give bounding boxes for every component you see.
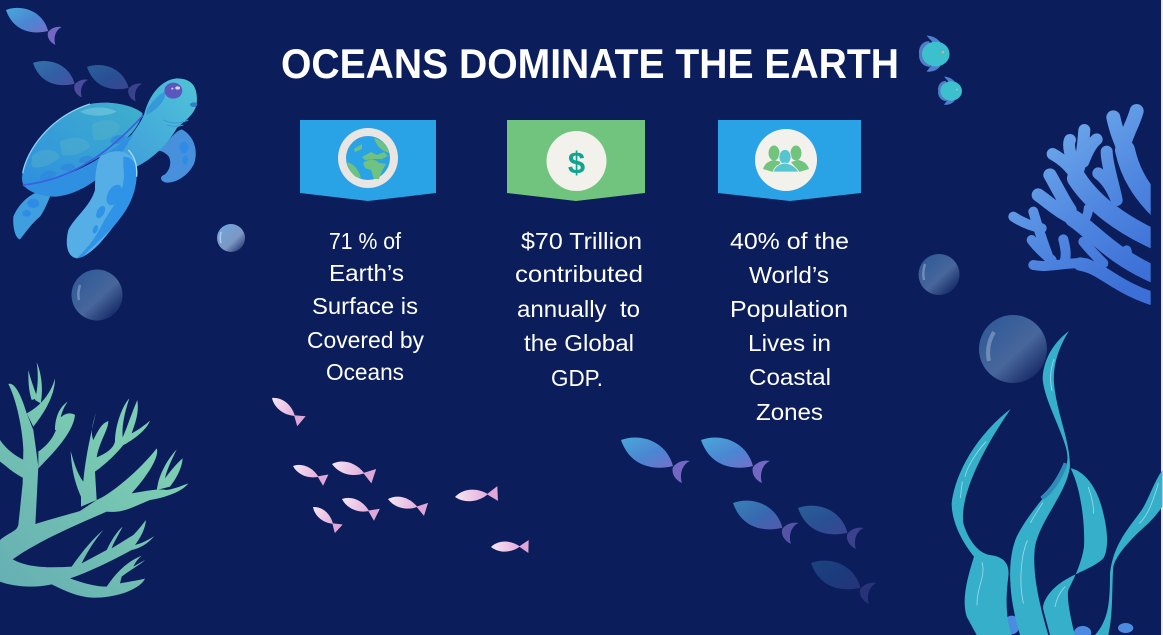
- text: coastal population: Population: [730, 296, 848, 322]
- fish: top-left school: [6, 8, 142, 101]
- text: coastal population: Zones: [756, 399, 823, 425]
- panel: global GDP: [507, 120, 649, 391]
- icon: people: [755, 129, 817, 191]
- bubble: right small: [918, 254, 960, 295]
- title: OCEANS DOMINATE THE EARTH: [281, 40, 899, 87]
- text: global GDP: annually to: [517, 296, 640, 322]
- banner: blue: [300, 120, 436, 201]
- fish: pink school: [267, 394, 529, 555]
- icon: globe: [338, 128, 398, 188]
- text: ocean coverage: Surface is: [312, 293, 418, 319]
- text: ocean coverage: Oceans: [326, 359, 404, 385]
- text: ocean coverage: 71 % of: [329, 228, 402, 254]
- text: global GDP: contributed: [515, 261, 643, 287]
- icon: tropical fish pair: [919, 36, 962, 105]
- bubble: small left: [217, 224, 245, 252]
- bubble: turtle lower left: [72, 270, 122, 320]
- banner: blue: [718, 120, 861, 201]
- illustration: blue coral: [1013, 111, 1163, 302]
- illustration: sea turtle: [13, 78, 197, 258]
- text: coastal population: Coastal: [749, 364, 831, 390]
- text: coastal population: 40% of the: [730, 228, 849, 254]
- text: coastal population: World’s: [749, 262, 829, 288]
- icon: dollar: [546, 131, 606, 191]
- text: ocean coverage: Covered by: [307, 327, 424, 353]
- bubble: right large: [979, 315, 1047, 383]
- text: coastal population: Lives in: [748, 330, 831, 356]
- text: global GDP: the Global: [524, 330, 634, 356]
- panel: coastal population: [718, 120, 861, 425]
- icon: dollar: $: [568, 145, 585, 180]
- text: global GDP: $70 Trillion: [521, 228, 642, 254]
- text: global GDP: GDP.: [551, 365, 603, 391]
- banner: green: [507, 120, 645, 201]
- illustration: seaweed: [952, 331, 1162, 635]
- panel: ocean coverage: [300, 120, 436, 385]
- text: ocean coverage: Earth’s: [329, 260, 404, 286]
- illustration: green coral: [0, 362, 188, 598]
- fish: blue school: [621, 437, 877, 604]
